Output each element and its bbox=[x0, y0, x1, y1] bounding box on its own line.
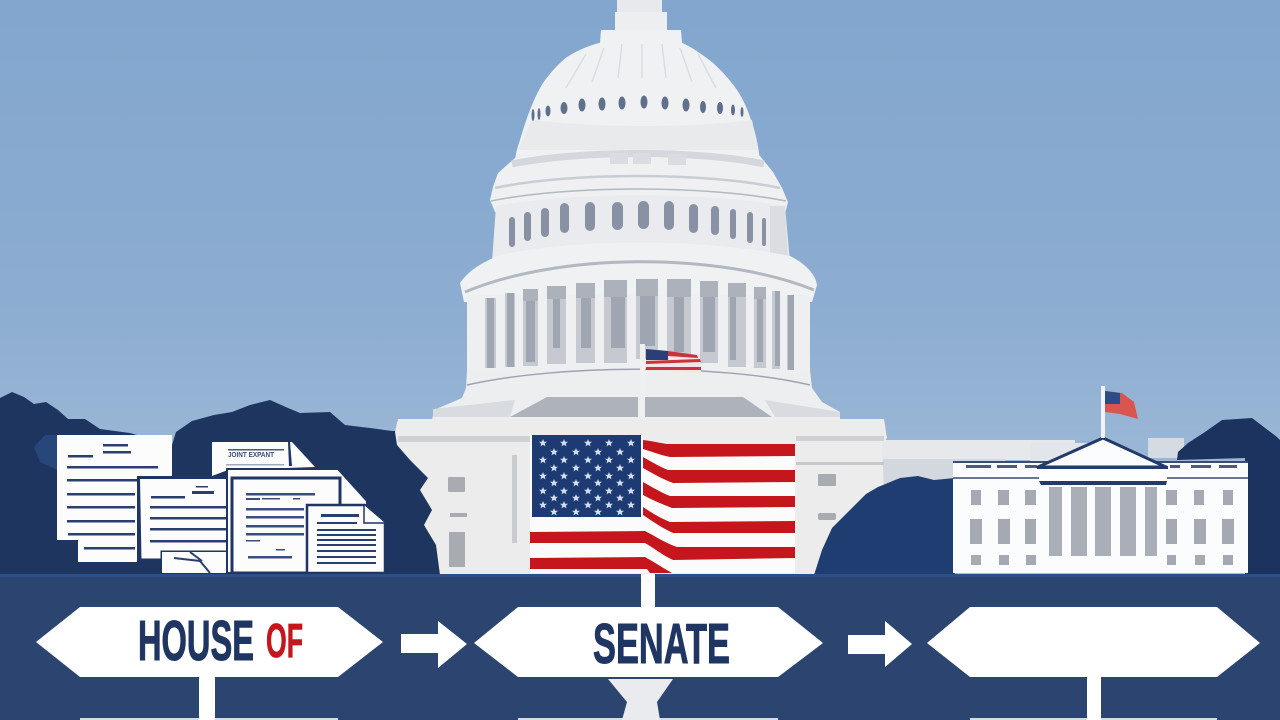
sign: senate bbox=[474, 607, 823, 677]
white house frieze marks bbox=[966, 465, 1237, 468]
drum with windows bbox=[492, 196, 790, 262]
arrow: house to senate bbox=[401, 621, 467, 668]
document 3 with title bbox=[212, 442, 315, 476]
sign: senate: SENATE bbox=[593, 612, 730, 676]
stem under third sign bbox=[1087, 677, 1101, 720]
documents stack bbox=[57, 435, 385, 573]
capitol building bbox=[395, 0, 887, 575]
flag canton with stars bbox=[532, 435, 641, 517]
colonnade bbox=[467, 279, 810, 387]
left tree line bbox=[0, 392, 470, 575]
main dome bbox=[515, 42, 760, 160]
flag red stripes bbox=[530, 440, 795, 573]
sign: house of: OF bbox=[266, 615, 303, 668]
rotunda base bbox=[432, 369, 840, 420]
document 2 bbox=[138, 478, 228, 560]
sign: house of: HOUSE bbox=[138, 609, 254, 673]
dome lantern bbox=[600, 0, 682, 43]
pedestal below senate bbox=[608, 679, 673, 720]
white house bbox=[953, 386, 1248, 573]
lower ledge bbox=[460, 242, 817, 302]
document 3 with title: JOINT EXPANT bbox=[228, 450, 274, 459]
sky background bbox=[0, 0, 1280, 575]
right trees bbox=[814, 418, 1280, 575]
central american flag bbox=[530, 435, 795, 573]
document small bottom bbox=[162, 552, 229, 573]
building windows bbox=[448, 474, 836, 567]
document 5 bbox=[307, 505, 385, 573]
white house windows bbox=[970, 490, 1234, 565]
white house flag bbox=[1101, 386, 1138, 438]
sign: house of bbox=[36, 607, 383, 677]
colonnade capitals bbox=[523, 279, 766, 301]
document 1 bbox=[57, 435, 172, 562]
dome windows bbox=[532, 96, 744, 121]
right wing of capitol bbox=[878, 438, 1184, 491]
sign: blank third bbox=[927, 607, 1260, 677]
navy process band bbox=[0, 574, 1280, 720]
white house columns bbox=[1049, 487, 1157, 556]
upper drum ledges bbox=[490, 153, 788, 214]
colonnade bays bbox=[485, 279, 794, 371]
main building bbox=[395, 419, 887, 575]
white house portico bbox=[1037, 438, 1168, 485]
connector: flag to senate bbox=[641, 574, 655, 608]
thin lower rails bbox=[80, 718, 1217, 720]
document 4 bbox=[227, 469, 367, 573]
stem under house bbox=[199, 677, 215, 720]
capitol small flag bbox=[640, 344, 701, 418]
arrow: senate to president bbox=[848, 621, 912, 667]
colonnade dark recesses bbox=[487, 279, 794, 370]
